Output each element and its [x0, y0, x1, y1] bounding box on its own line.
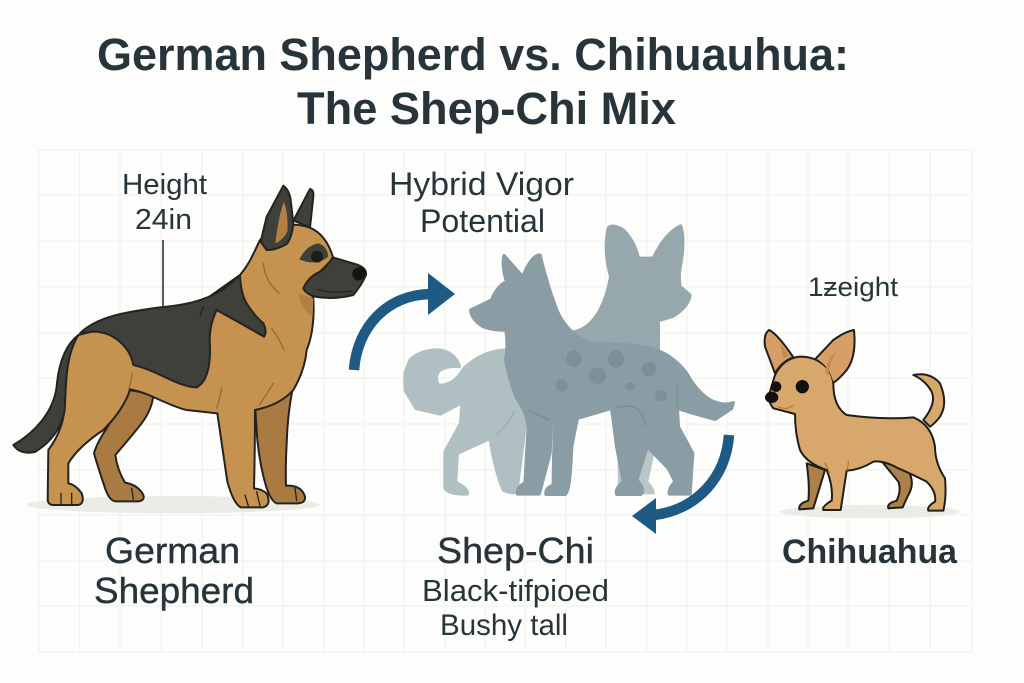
hybrid vigor label: Potential [420, 203, 545, 239]
German Shepherd label: Shepherd [94, 570, 254, 611]
icon: Chihuahua illustration [765, 330, 960, 518]
height label: German Shepherd: Height [122, 169, 207, 201]
German Shepherd label [94, 530, 254, 611]
title: The Shep-Chi Mix [297, 83, 676, 134]
Shep-Chi label: Bushy tall [440, 609, 568, 642]
height label: German Shepherd [122, 169, 207, 307]
Shep-Chi label: Shep-Chi [437, 530, 594, 571]
back dog body and curled tail [405, 350, 527, 494]
Shep-Chi label: Black-tifpioed [422, 573, 609, 608]
Shep-Chi label [422, 530, 609, 642]
icon: Shep-Chi hybrid silhouette [405, 226, 733, 494]
arrow: from hybrid [632, 435, 729, 534]
title: German Shepherd vs. Chihuauhua: [97, 29, 849, 80]
height label: Chihuahua: 1ƶeight [808, 272, 899, 302]
back dog upright silhouette [568, 226, 690, 357]
height label: German Shepherd: 24in [135, 204, 192, 236]
German Shepherd label: German [105, 530, 240, 571]
hybrid vigor label: Hybrid Vigor [389, 166, 574, 202]
arrow: to hybrid [354, 273, 455, 370]
front dog silhouette [471, 255, 733, 494]
Chihuahua label: Chihuahua [782, 533, 958, 571]
icon: German Shepherd illustration [13, 186, 367, 513]
hybrid vigor label [389, 166, 574, 239]
title [97, 29, 849, 134]
